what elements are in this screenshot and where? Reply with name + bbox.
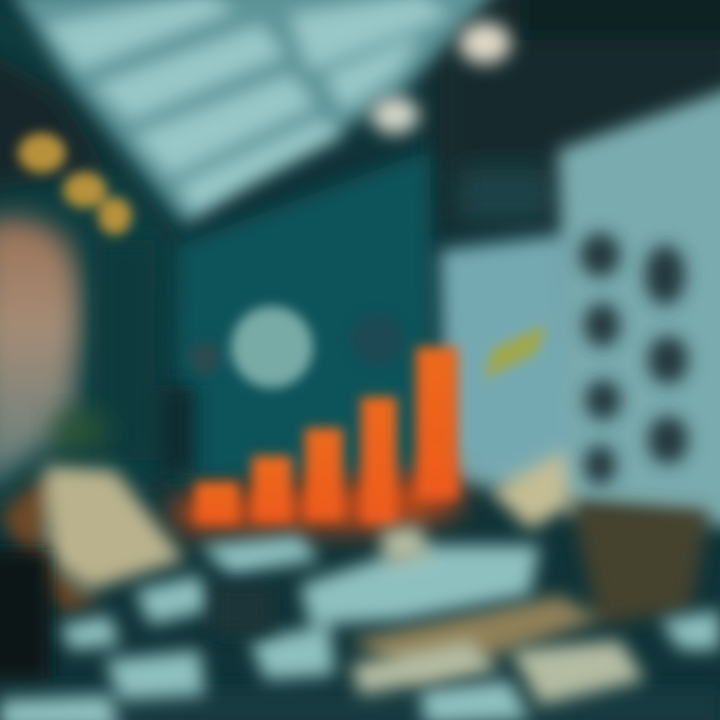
orange bar glow bbox=[170, 470, 460, 530]
wall clock circle bbox=[189, 306, 404, 388]
pale right wall bbox=[440, 85, 720, 530]
lower dark shapes bbox=[0, 550, 720, 720]
dark object on desk bbox=[212, 585, 272, 635]
pale papers bbox=[0, 535, 720, 720]
left dark wall bbox=[0, 0, 180, 510]
green yellow arrow bbox=[485, 326, 548, 380]
desk tan area bbox=[0, 450, 710, 680]
yellow lights bbox=[18, 133, 132, 235]
plant bbox=[52, 410, 108, 450]
upper right dark ceiling bbox=[430, 0, 720, 230]
cream papers bbox=[350, 525, 645, 705]
skylight panes bbox=[45, 0, 450, 215]
dark column bbox=[95, 240, 195, 475]
teal back wall bbox=[175, 150, 435, 480]
skylight window bbox=[10, 0, 505, 225]
dark dots on right panel bbox=[580, 233, 688, 485]
left arched panel bbox=[0, 218, 81, 490]
orange bar chart bbox=[195, 347, 458, 524]
ceiling lamps bbox=[371, 22, 511, 134]
